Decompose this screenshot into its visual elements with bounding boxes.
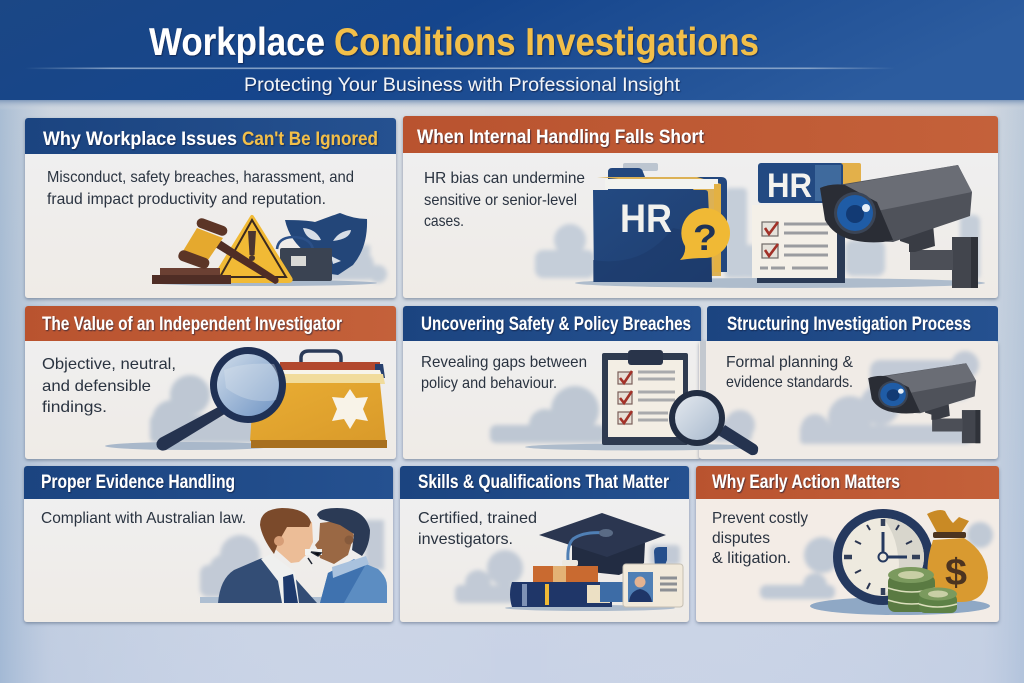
- title divider rule: [25, 68, 895, 69]
- icon: HR document checklist: [752, 163, 861, 283]
- heading: Why Workplace Issues: [43, 128, 237, 150]
- icon: gavel, warning sign, mask, briefcase: [152, 213, 387, 286]
- body text: policy and behaviour.: [421, 375, 557, 392]
- body text: Formal planning &: [726, 354, 853, 371]
- body text: [42, 356, 176, 416]
- divider strip: [700, 341, 706, 393]
- panel header: [25, 118, 396, 154]
- icon: HR folder with question mark: [593, 163, 730, 282]
- panel header: [403, 306, 701, 341]
- panel: skills & qualifications that matter: [400, 466, 689, 622]
- panel: structuring investigation process: [699, 306, 998, 459]
- body text: HR bias can undermine: [424, 170, 585, 187]
- body text: Certified, trained: [418, 510, 537, 527]
- heading: When Internal Handling Falls Short: [417, 126, 704, 148]
- body text: and defensible: [42, 378, 151, 395]
- body text: cases.: [424, 213, 464, 230]
- heading: [43, 128, 378, 150]
- icon: magnifier and case folder: [105, 347, 387, 451]
- header banner: [0, 0, 1024, 100]
- body text: [47, 169, 354, 208]
- panel: the value of an independent investigator: [25, 306, 396, 459]
- icon: HR folder with question mark: ?: [693, 217, 717, 258]
- icon: graduation cap, books, ID badge: [455, 513, 683, 611]
- body text: [421, 354, 587, 392]
- body text: sensitive or senior-level: [424, 192, 577, 209]
- heading: Can't Be Ignored: [242, 128, 378, 150]
- icon: HR document checklist: HR: [767, 167, 812, 205]
- body text: investigators.: [418, 531, 513, 548]
- panel: proper evidence handling: [24, 466, 393, 622]
- icon: security camera: [868, 363, 980, 443]
- panel header: [25, 306, 396, 341]
- body text: findings.: [42, 399, 107, 416]
- body text: [712, 510, 808, 567]
- heading: Skills & Qualifications That Matter: [418, 471, 669, 493]
- icon: clock, money bag and cash: $: [945, 552, 967, 594]
- body text: Objective, neutral,: [42, 356, 176, 373]
- panel header: [24, 466, 393, 499]
- body text: Compliant with Australian law.: [41, 510, 246, 527]
- panel header: [707, 306, 998, 341]
- icon: clouds: [535, 188, 980, 280]
- panel: why early action matters: [696, 466, 999, 622]
- icon: clouds: [712, 351, 979, 444]
- icon: checklist clipboard and magnifier: [490, 350, 758, 455]
- body text: disputes: [712, 530, 770, 547]
- panel header: [400, 466, 689, 499]
- icon: security camera: [820, 165, 978, 288]
- body text: Misconduct, safety breaches, harassment, and: [47, 169, 354, 186]
- title: Workplace: [149, 21, 325, 64]
- icon: ground shadow: [575, 278, 985, 288]
- subtitle: Protecting Your Business with Professional Insight: [244, 74, 681, 96]
- title: Conditions Investigations: [334, 21, 759, 64]
- body text: Revealing gaps between: [421, 354, 587, 371]
- body text: [424, 170, 585, 230]
- body text: evidence standards.: [726, 374, 853, 391]
- heading: The Value of an Independent Investigator: [42, 313, 342, 335]
- panel header: [696, 466, 999, 499]
- body text: & litigation.: [712, 550, 791, 567]
- panel: uncovering safety & policy breaches: [403, 306, 701, 459]
- heading: Proper Evidence Handling: [41, 471, 235, 493]
- heading: Uncovering Safety & Policy Breaches: [421, 313, 691, 335]
- body text: fraud impact productivity and reputation.: [47, 191, 326, 208]
- heading: Why Early Action Matters: [712, 471, 900, 493]
- panel header: [403, 116, 998, 153]
- icon: HR folder with question mark: HR: [620, 197, 672, 241]
- icon: two colleagues talking: [200, 508, 387, 603]
- body text: [726, 354, 853, 391]
- panel: why workplace issues can't be ignored: [25, 118, 396, 298]
- panel: when internal handling falls short: [403, 116, 998, 298]
- icon: clock, money bag and cash: [760, 509, 993, 615]
- body text: Prevent costly: [712, 510, 808, 527]
- body text: [418, 510, 537, 548]
- title: [149, 21, 759, 64]
